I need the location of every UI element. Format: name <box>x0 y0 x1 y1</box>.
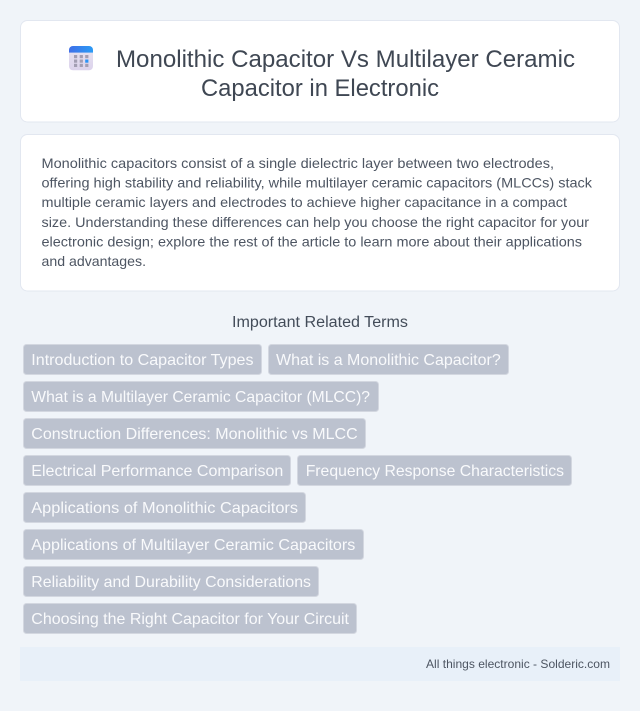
icon: calendar grid <box>69 46 93 70</box>
tag: monolithic applications: Applications of Monolithic Capacitors <box>31 500 298 517</box>
tag: construction differences: Construction Differences: Monolithic vs MLCC <box>31 426 358 443</box>
text block: introduction: size. Understanding these differences can help you choose the right capacitor for your <box>42 214 589 230</box>
tag: MLCC applications <box>24 530 364 560</box>
tag: MLCC definition: What is a Multilayer Ceramic Capacitor (MLCC)? <box>31 389 370 406</box>
text block: introduction: Monolithic capacitors consist of a single dielectric layer between two electrodes, <box>42 155 554 171</box>
title <box>116 46 575 102</box>
tag: MLCC applications: Applications of Multilayer Ceramic Capacitors <box>31 537 355 554</box>
heading: related terms: Important Related Terms <box>232 314 408 331</box>
footer <box>20 647 620 681</box>
tag: frequency response <box>298 456 572 486</box>
panel: related term tags <box>24 344 572 634</box>
title: Capacitor in Electronic <box>201 75 439 102</box>
text block: introduction <box>42 155 593 269</box>
tag: construction differences <box>24 418 366 448</box>
panel: introduction paragraph <box>20 134 620 291</box>
tag: monolithic definition: What is a Monolithic Capacitor? <box>276 352 501 369</box>
tag: frequency response: Frequency Response Characteristics <box>306 463 564 480</box>
tag: choosing capacitor <box>24 604 356 634</box>
tag: introduction: Introduction to Capacitor Types <box>31 352 254 369</box>
tag: reliability <box>24 566 318 596</box>
tag: choosing capacitor: Choosing the Right Capacitor for Your Circuit <box>31 611 350 628</box>
text block: introduction: and advantages. <box>42 253 146 269</box>
title: Monolithic Capacitor Vs Multilayer Ceramic <box>116 46 575 73</box>
text block: introduction: electronic design; explore the rest of the article to learn more about their applications <box>42 233 582 249</box>
tag: introduction <box>24 344 262 374</box>
tag: reliability: Reliability and Durability Considerations <box>31 574 311 591</box>
tag: electrical performance <box>24 456 290 486</box>
panel: title card <box>20 20 620 122</box>
footer: All things electronic - Solderic.com <box>426 657 610 671</box>
tag: electrical performance: Electrical Performance Comparison <box>31 463 283 480</box>
tag: monolithic definition <box>268 344 508 374</box>
tag: MLCC definition <box>24 382 378 412</box>
tag: monolithic applications <box>24 492 306 522</box>
text block: introduction: multiple ceramic layers and electrodes to achieve higher capacitance in a compact <box>42 194 567 210</box>
text block: introduction: offering high stability and reliability, while multilayer ceramic capacitors (MLCCs) stack <box>42 175 593 191</box>
